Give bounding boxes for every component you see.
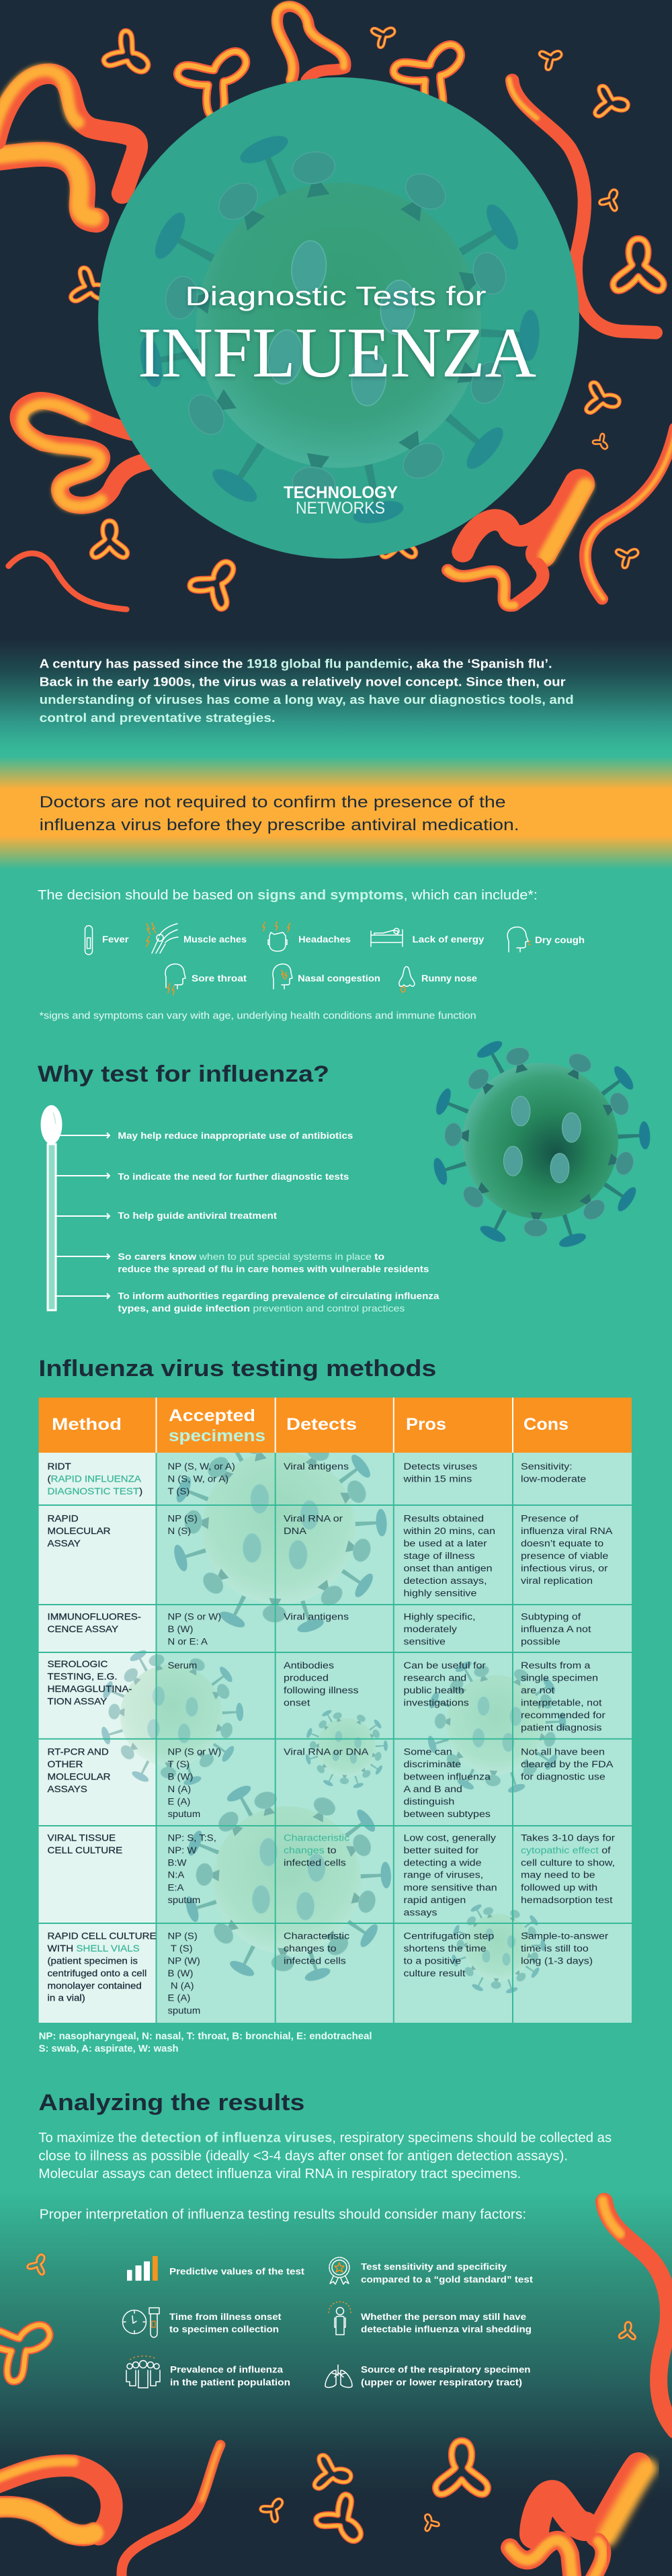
table legend: S: swab, A: aspirate, W: wash — [39, 2044, 179, 2054]
column: accepted specimens: N:A — [168, 1870, 185, 1881]
Whether the person label: detectable influenza viral shedding — [361, 2324, 532, 2335]
column: pros: detection assays, — [403, 1576, 487, 1586]
column: pros: Low cost, generally — [403, 1833, 497, 1843]
column: method: OTHER — [47, 1760, 83, 1770]
orange band statement: influenza virus before they prescribe antiviral medication. — [40, 816, 519, 834]
icon: nasal congestion head — [273, 964, 292, 989]
column: accepted specimens: sputum — [168, 1896, 200, 1906]
column: method: (RAPID INFLUENZA — [47, 1474, 141, 1484]
Time from illness label: Time from illness onset — [169, 2311, 282, 2322]
Prevalence label: in the patient population — [170, 2376, 290, 2387]
column: method: RIDT — [47, 1462, 71, 1472]
hero: virus illustration — [120, 118, 559, 545]
analysis paragraph: To maximize the detection of influenza viruses, respiratory specimens should be collected as — [38, 2131, 612, 2146]
hero: virus worms — [0, 5, 672, 609]
table header row: Pros — [406, 1415, 446, 1434]
Predictive values label: Predictive values of the test — [169, 2265, 304, 2276]
Sore throat label: Sore throat — [192, 973, 247, 983]
hero: small Y-shaped viruses — [70, 20, 664, 611]
intro paragraph: understanding of viruses has come a long way, as have our diagnostics tools, and — [40, 693, 574, 707]
virus illustration: why test — [431, 1038, 650, 1250]
column: pros: Some can — [403, 1748, 452, 1757]
column: cons: infectious virus, or — [521, 1564, 607, 1574]
symptoms panel — [85, 922, 585, 995]
table header row: Detects — [286, 1415, 357, 1434]
column: accepted specimens: NP (S) — [168, 1931, 198, 1941]
column: detects — [284, 1462, 369, 1966]
reasons to test list: May help reduce inappropriate use of antibiotics — [118, 1130, 353, 1141]
Test sensitivity label: compared to a “gold standard” test — [361, 2273, 533, 2284]
column: accepted specimens: N or E: A — [168, 1637, 208, 1648]
symptoms footnote: *signs and symptoms can vary with age, underlying health conditions and immune function — [40, 1011, 476, 1022]
column: detects: infected cells — [284, 1858, 346, 1868]
table: influenza testing methods — [39, 1398, 632, 2023]
column: pros: Centrifugation step — [403, 1931, 494, 1941]
column: detects: Viral RNA or — [284, 1514, 343, 1524]
logo: Technology Networks — [284, 483, 398, 518]
column: pros: public health — [403, 1686, 464, 1696]
column: pros: distinguish — [403, 1798, 454, 1807]
column: cons: influenza viral RNA — [521, 1527, 613, 1537]
reasons to test list — [118, 1130, 439, 1314]
column: pros: moderately — [403, 1625, 458, 1635]
column: cons: presence of viable — [521, 1552, 608, 1562]
column: method: CELL CULTURE — [47, 1846, 122, 1856]
column: method: ASSAYS — [47, 1785, 87, 1795]
column: pros: range of viruses, — [403, 1871, 483, 1880]
column: method: in a vial) — [47, 1993, 85, 2003]
analysis paragraph: close to illness as possible (ideally <3-4 days after onset for antigen detection assays). — [38, 2148, 568, 2163]
icon: runny nose — [399, 967, 415, 992]
column: cons: possible — [521, 1638, 560, 1647]
column: accepted specimens: NP: S, T:S, — [168, 1833, 216, 1843]
column: pros: within 20 mins, can — [403, 1527, 495, 1537]
column: pros: within 15 mins — [403, 1475, 472, 1484]
column: method: (patient specimen is — [47, 1956, 138, 1966]
table header row — [39, 1398, 632, 1453]
column: method: centrifuged onto a cell — [47, 1969, 146, 1979]
reasons to test list: To help guide antiviral treatment — [118, 1210, 277, 1221]
Muscle aches label: Muscle aches — [183, 934, 247, 944]
column: pros: onset than antigen — [403, 1564, 493, 1574]
analysis paragraph: Molecular assays can detect influenza viral RNA in respiratory tract specimens. — [38, 2167, 521, 2181]
column: pros: be used at a later — [403, 1539, 487, 1549]
heading: testing methods: Influenza virus testing methods — [38, 1356, 436, 1381]
column: pros: A and B and — [403, 1785, 462, 1795]
column: cons: Sensitivity: — [521, 1462, 573, 1472]
Whether the person label — [361, 2311, 532, 2335]
Source label: (upper or lower respiratory tract) — [361, 2376, 522, 2387]
icon: lungs — [325, 2365, 352, 2387]
column: accepted specimens: T (S) — [168, 1487, 190, 1497]
Headaches label: Headaches — [298, 934, 351, 944]
column: pros: Can be useful for — [403, 1661, 486, 1671]
column: method — [47, 1462, 157, 2003]
analysis paragraph — [38, 2131, 612, 2181]
column: method: ASSAY — [47, 1539, 81, 1549]
factors panel — [122, 2256, 533, 2388]
column: detects: Viral antigens — [284, 1462, 349, 1472]
column: accepted specimens: E (A) — [168, 1797, 190, 1808]
column: cons: long (1-3 days) — [521, 1956, 593, 1966]
column: pros: discriminate — [403, 1760, 461, 1770]
column: accepted specimens — [168, 1462, 235, 2016]
column: detects: DNA — [284, 1527, 306, 1537]
column: pros: highly sensitive — [403, 1588, 476, 1599]
column: method: TION ASSAY — [47, 1697, 108, 1707]
table header row: Method — [52, 1415, 122, 1434]
column: accepted specimens: sputum — [168, 1810, 200, 1820]
column: detects: onset — [284, 1699, 310, 1708]
icon: swab with arrows — [40, 1105, 110, 1310]
Runny nose label: Runny nose — [421, 973, 478, 983]
column: cons: are not — [521, 1686, 555, 1696]
column: cons: low-moderate — [521, 1475, 586, 1484]
column: accepted specimens: Serum — [168, 1661, 197, 1671]
table legend: NP: nasopharyngeal, N: nasal, T: throat, B: bronchial, E: endotracheal — [39, 2031, 372, 2042]
column: cons: cell culture to show, — [521, 1858, 615, 1868]
orange band statement: Doctors are not required to confirm the presence of the — [40, 793, 506, 811]
column: detects: changes to — [284, 1944, 337, 1954]
column: accepted specimens: E:A — [168, 1883, 184, 1893]
table header row: Cons — [523, 1415, 569, 1434]
column: accepted specimens: E (A) — [168, 1993, 190, 2004]
column: pros: to a positive — [403, 1956, 461, 1966]
Prevalence label: Prevalence of influenza — [170, 2364, 283, 2375]
logo: Technology Networks: TECHNOLOGY — [284, 483, 398, 502]
column: method: monolayer contained — [47, 1981, 142, 1991]
column: pros: assays — [403, 1908, 437, 1918]
column: method: MOLECULAR — [47, 1527, 111, 1537]
column: method: HEMAGGLUTINA- — [47, 1685, 132, 1695]
column: pros: culture result — [403, 1969, 466, 1979]
Time from illness label — [169, 2311, 282, 2335]
title: INFLUENZA — [138, 313, 536, 392]
column: detects: Viral RNA or DNA — [284, 1748, 369, 1757]
column: method: RT-PCR AND — [47, 1747, 109, 1757]
column: cons: may need to be — [521, 1871, 595, 1880]
column: cons: followed up with — [521, 1883, 597, 1893]
column: cons: cytopathic effect of — [521, 1846, 612, 1856]
bottom Y-shaped viruses — [0, 2251, 636, 2553]
column: detects: Characteristic — [284, 1833, 350, 1843]
factors intro: Proper interpretation of influenza testing results should consider many factors: — [40, 2207, 526, 2222]
column: accepted specimens: NP (S or W) — [168, 1747, 221, 1758]
icon: person shedding virus — [329, 2302, 351, 2335]
table header row: specimens — [169, 1426, 265, 1445]
column: cons: doesn’t equate to — [521, 1539, 603, 1549]
heading: analyzing the results: Analyzing the results — [38, 2090, 304, 2116]
column: pros: Highly specific, — [403, 1612, 476, 1622]
icon: clock and specimen tube — [122, 2308, 159, 2337]
hero: teal circle — [98, 77, 579, 559]
column: detects: Viral antigens — [284, 1612, 349, 1622]
column: detects: produced — [284, 1674, 329, 1683]
icon: dry cough head — [507, 927, 530, 952]
reasons to test list: To indicate the need for further diagnostic tests — [118, 1171, 349, 1182]
column: cons: interpretable, not — [521, 1699, 602, 1708]
column: accepted specimens: T (S) — [171, 1944, 193, 1954]
column: cons: Sample-to-answer — [521, 1931, 608, 1941]
reasons to test list: types, and guide infection prevention and control practices — [118, 1303, 405, 1314]
Prevalence label — [170, 2364, 290, 2387]
column: cons: hemadsorption test — [521, 1896, 613, 1906]
table header row: Accepted — [169, 1406, 255, 1425]
column: pros: between influenza — [403, 1772, 491, 1782]
Lack of energy label: Lack of energy — [413, 934, 485, 944]
column: pros: better suited for — [403, 1846, 478, 1856]
icon: sore throat head — [165, 964, 185, 995]
Nasal congestion label: Nasal congestion — [298, 973, 380, 983]
intro paragraph: Back in the early 1900s, the virus was a relatively novel concept. Since then, our — [40, 675, 566, 688]
column: pros: stage of illness — [403, 1552, 475, 1562]
intro paragraph: A century has passed since the 1918 global flu pandemic , aka the ‘Spanish flu’. — [40, 657, 552, 671]
Source label: Source of the respiratory specimen — [361, 2364, 531, 2375]
column: method: CENCE ASSAY — [47, 1625, 119, 1635]
column: detects: infected cells — [284, 1956, 346, 1966]
column: accepted specimens: NP (S) — [168, 1514, 198, 1524]
column: accepted specimens: NP (S, W, or A) — [168, 1462, 235, 1472]
column: method: VIRAL TISSUE — [47, 1833, 116, 1843]
Whether the person label: Whether the person may still have — [361, 2311, 526, 2322]
intro paragraph — [40, 657, 574, 725]
Test sensitivity label: Test sensitivity and specificity — [361, 2261, 507, 2272]
Time from illness label: to specimen collection — [169, 2324, 279, 2335]
column: cons: Results from a — [521, 1661, 591, 1671]
column: method: SEROLOGIC — [47, 1660, 108, 1670]
column: pros: rapid antigen — [403, 1896, 466, 1906]
column: cons: viral replication — [521, 1576, 593, 1586]
icon: knee muscle aches — [146, 923, 178, 953]
column: method: MOLECULAR — [47, 1772, 111, 1782]
column: cons: time is still too — [521, 1944, 589, 1954]
column: accepted specimens: N (S, W, or A) — [168, 1474, 228, 1485]
icon: headache — [263, 922, 290, 951]
column: method: RAPID CELL CULTURE — [47, 1931, 157, 1941]
column: cons: recommended for — [521, 1711, 605, 1721]
icon: rosette — [329, 2257, 349, 2284]
column: cons: influenza A not — [521, 1625, 591, 1635]
column: pros: detecting a wide — [403, 1858, 482, 1868]
column: method: RAPID — [47, 1514, 79, 1524]
column: cons: cleared by the FDA — [521, 1760, 614, 1770]
column: pros: sensitive — [403, 1638, 446, 1647]
column: method: IMMUNOFLUORES- — [47, 1612, 141, 1622]
column: cons: Takes 3-10 days for — [521, 1833, 615, 1843]
column: accepted specimens: sputum — [168, 2006, 200, 2016]
column: method: DIAGNOSTIC TEST) — [47, 1487, 142, 1497]
column: detects: changes to — [284, 1846, 337, 1856]
column: detects: following illness — [284, 1686, 359, 1696]
column: cons — [521, 1462, 615, 1966]
bottom worms — [0, 2200, 672, 2576]
column: accepted specimens: B (W) — [168, 1772, 193, 1782]
Source label — [361, 2364, 531, 2387]
column: pros: shortens the time — [403, 1944, 487, 1954]
icon: thermometer — [85, 926, 93, 955]
column: accepted specimens: N (A) — [168, 1785, 191, 1795]
column: accepted specimens: NP (W) — [168, 1956, 200, 1966]
signs and symptoms intro: The decision should be based on signs and symptoms , which can include*: — [38, 888, 538, 903]
Dry cough label: Dry cough — [535, 935, 585, 945]
column: pros: between subtypes — [403, 1810, 491, 1820]
orange band statement — [40, 793, 519, 834]
Test sensitivity label — [361, 2261, 533, 2284]
column: pros — [403, 1462, 497, 1979]
column: cons: Presence of — [521, 1514, 579, 1524]
column: pros: research and — [403, 1674, 466, 1683]
column: accepted specimens: NP (S or W) — [168, 1612, 221, 1622]
heading: why test: Why test for influenza? — [38, 1061, 329, 1087]
icon: person in bed — [371, 928, 403, 947]
column: method: TESTING, E.G. — [47, 1672, 118, 1682]
icon: bar chart — [127, 2256, 158, 2281]
column: detects: Characteristic — [284, 1931, 350, 1941]
table background viruses — [100, 1426, 566, 1995]
column: pros: Results obtained — [403, 1514, 484, 1524]
column: accepted specimens: T (S) — [168, 1760, 190, 1770]
column: method: WITH SHELL VIALS — [47, 1944, 140, 1954]
column: pros: investigations — [403, 1699, 469, 1708]
column: accepted specimens: N (A) — [171, 1981, 194, 1991]
column: accepted specimens: B:W — [168, 1858, 187, 1868]
column: detects: Antibodies — [284, 1661, 334, 1671]
column: cons: single specimen — [521, 1674, 598, 1683]
column: cons: Not all have been — [521, 1748, 605, 1757]
Fever label: Fever — [102, 934, 129, 944]
column: cons: patient diagnosis — [521, 1724, 602, 1733]
column: pros: more sensitive than — [403, 1883, 497, 1893]
intro paragraph: control and preventative strategies. — [40, 711, 276, 725]
table legend — [39, 2031, 372, 2054]
column: accepted specimens: B (W) — [168, 1625, 193, 1635]
table body cells — [39, 1453, 632, 2023]
reasons to test list: So carers know when to put special systems in place to — [118, 1251, 384, 1262]
reasons to test list: To inform authorities regarding prevalence of circulating influenza — [118, 1291, 439, 1301]
column: accepted specimens: N (S) — [168, 1527, 191, 1537]
logo: Technology Networks: NETWORKS — [296, 499, 385, 518]
column: pros: Detects viruses — [403, 1462, 477, 1472]
reasons to test list: reduce the spread of flu in care homes with vulnerable residents — [118, 1264, 429, 1275]
column: cons: for diagnostic use — [521, 1772, 605, 1782]
column: cons: Subtyping of — [521, 1612, 581, 1622]
title: Diagnostic Tests for — [185, 282, 487, 311]
column: accepted specimens: B (W) — [168, 1969, 193, 1979]
icon: crowd of people — [126, 2356, 160, 2388]
column: accepted specimens: NP: W — [168, 1846, 197, 1856]
